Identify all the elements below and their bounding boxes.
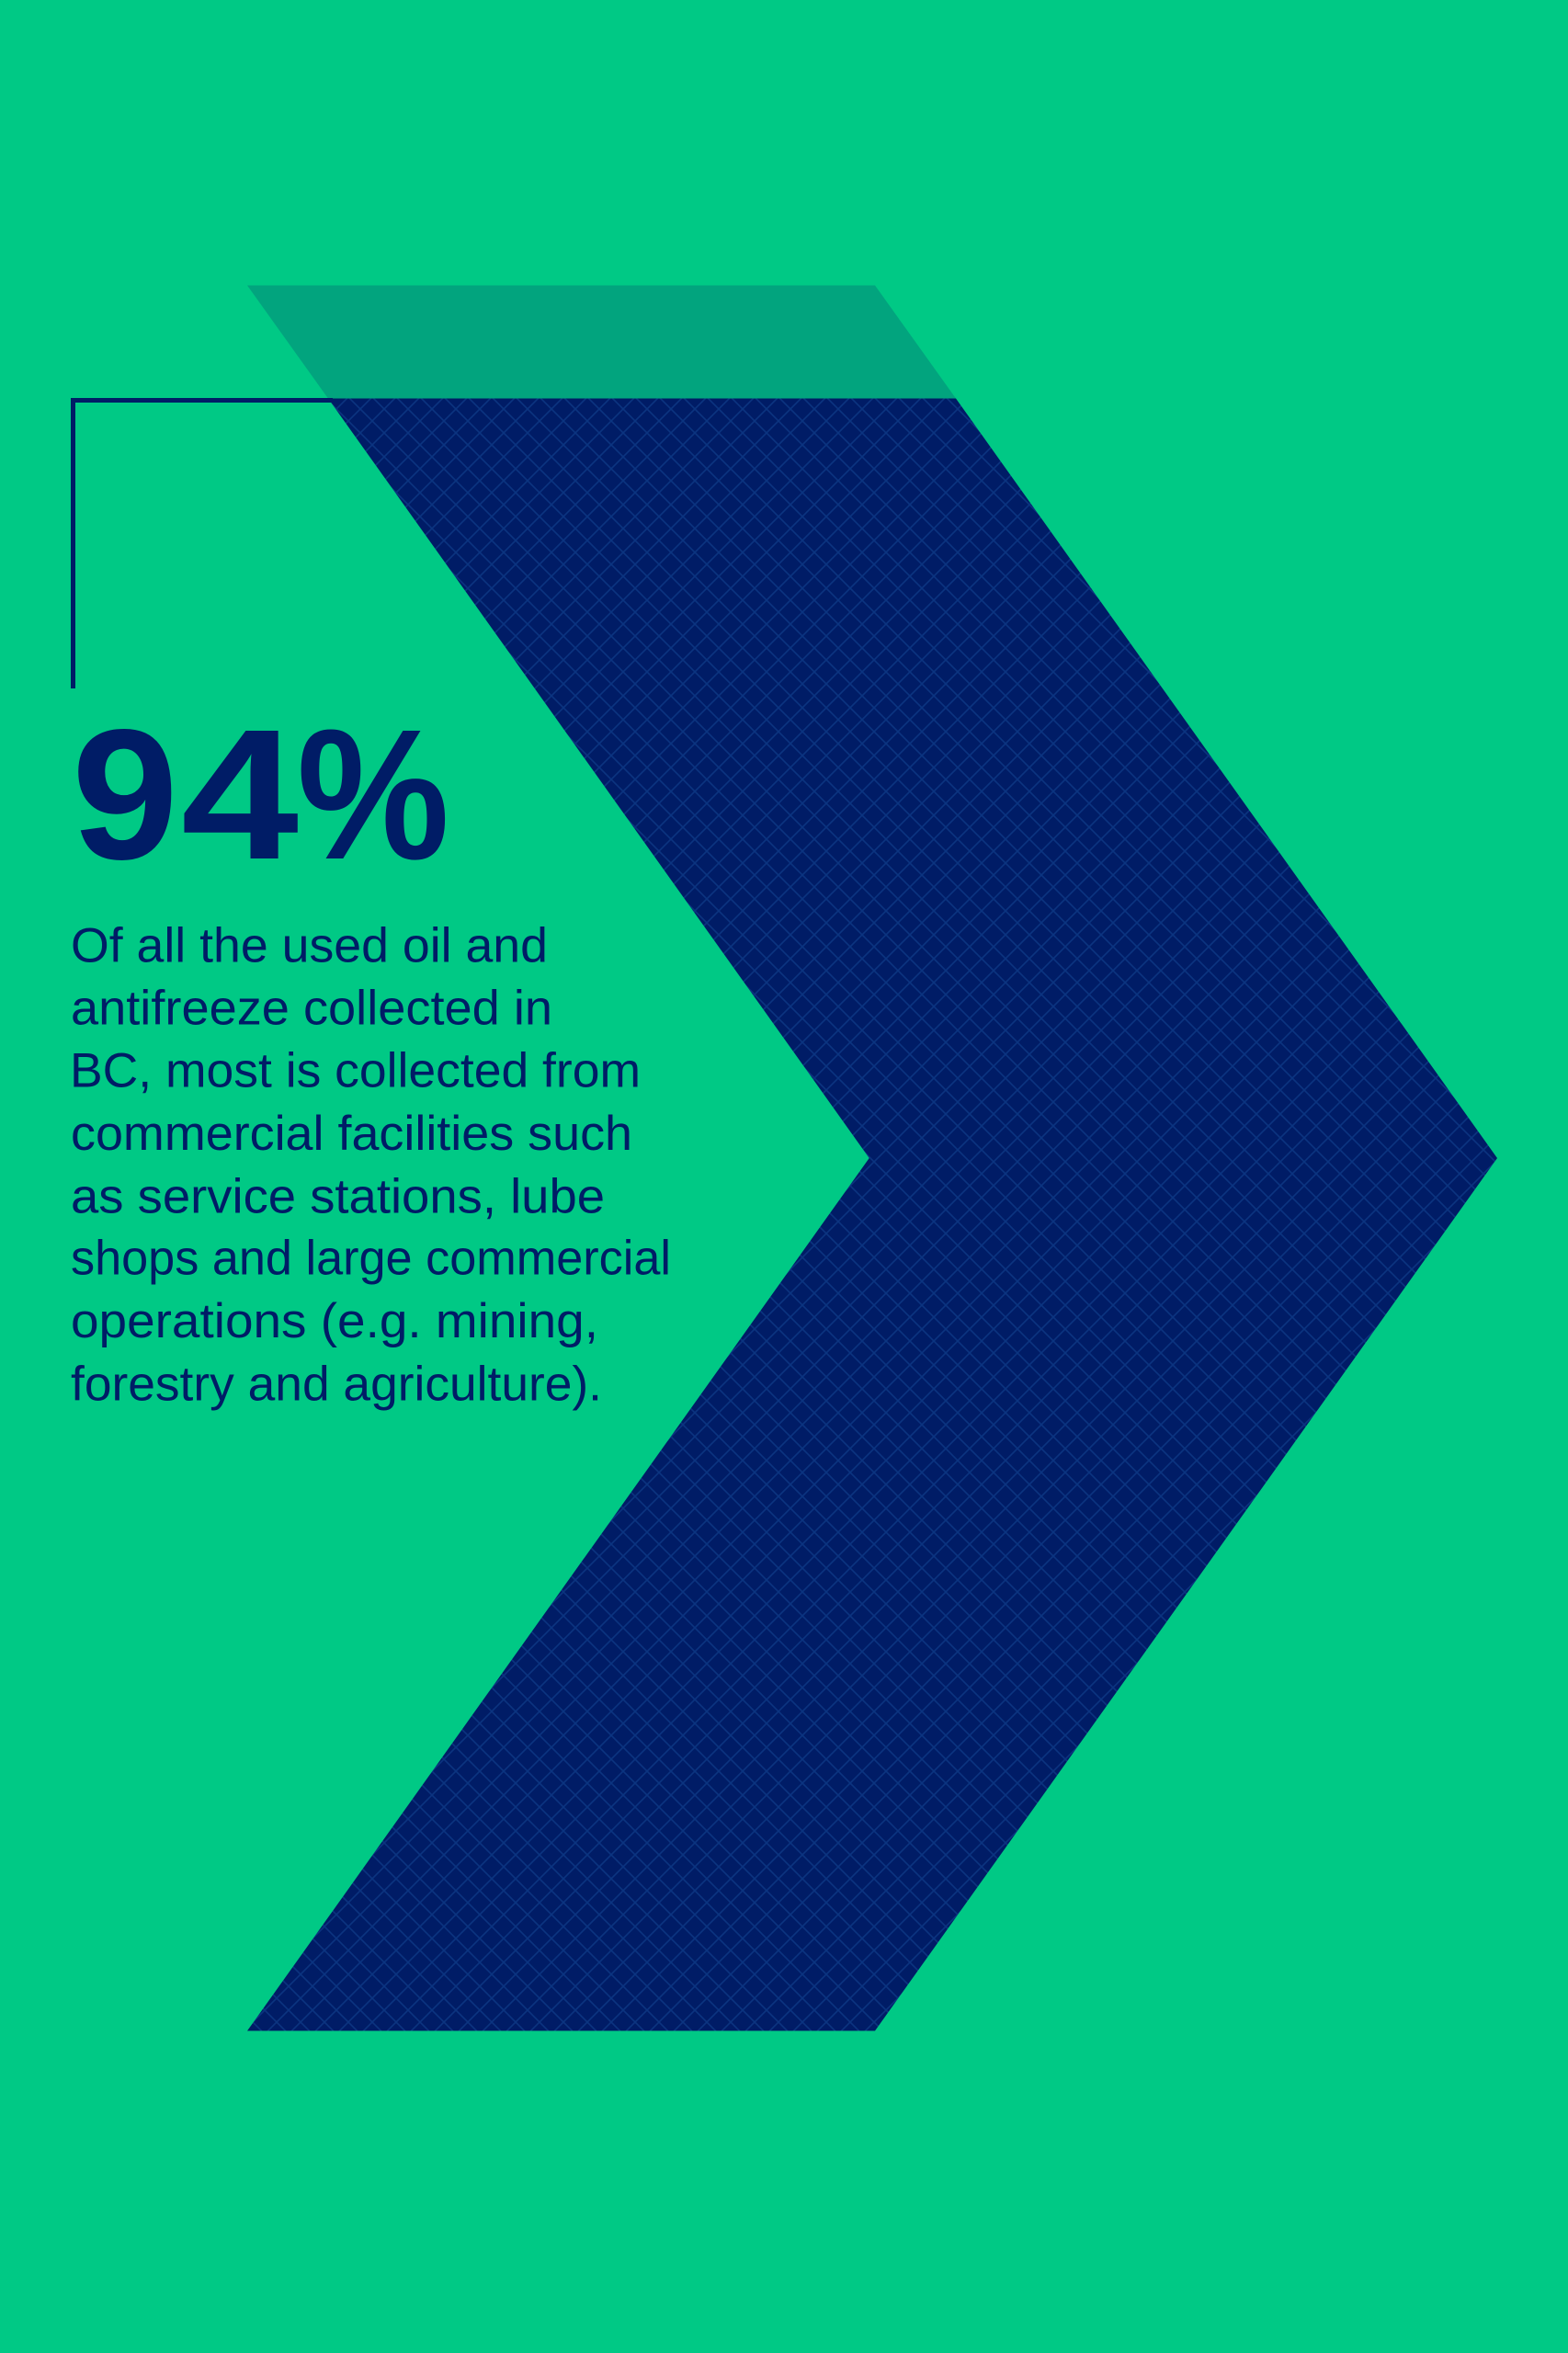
big statistic: 94%: 4 [181,690,299,898]
big statistic: 94% [72,690,449,898]
big statistic: 94%: 9 [72,690,178,898]
description text: BC, most is collected from [70,1043,641,1097]
bracket connector line [74,401,333,688]
description text: forestry and agriculture). [71,1357,602,1411]
chevron arrow with lattice pattern [247,399,1497,2031]
big statistic: 94%: % [297,690,449,898]
description text: as service stations, lube [71,1169,605,1223]
description text [70,919,671,1411]
description text: commercial facilities such [71,1107,632,1161]
description text: shops and large commercial [71,1232,671,1286]
description text: Of all the used oil and [71,919,548,973]
description text: antifreeze collected in [71,981,552,1035]
description text: operations (e.g. mining, [71,1294,598,1348]
chevron top band [247,285,956,399]
